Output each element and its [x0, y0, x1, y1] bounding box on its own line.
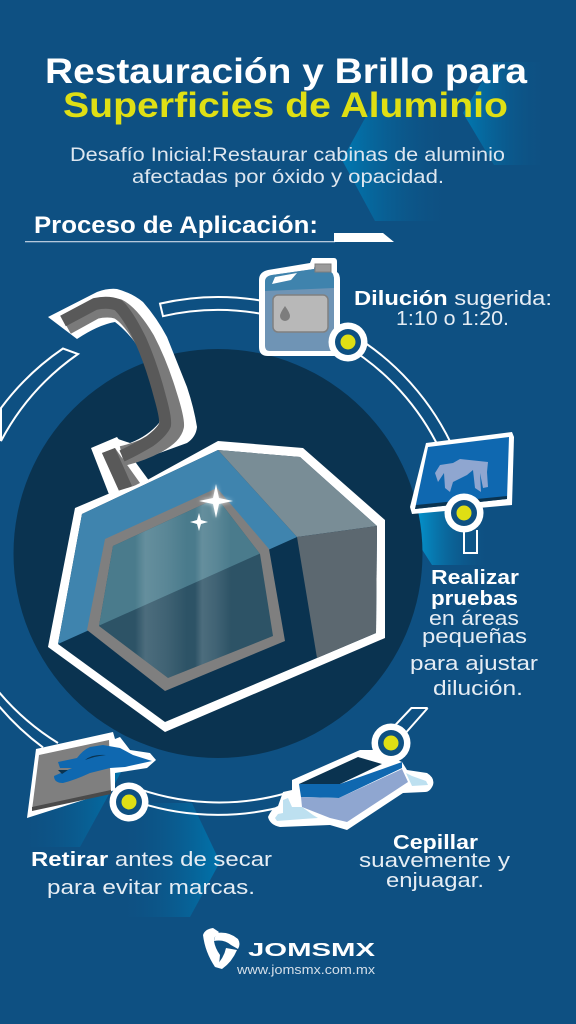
- footer logo: [203, 928, 376, 977]
- section heading: Proceso de Aplicación:: [34, 212, 318, 239]
- step 4: text: [31, 848, 272, 899]
- step 1: text: [354, 287, 552, 330]
- step 3: text: enjuagar.: [386, 869, 484, 892]
- subtitle: initial challenge: [70, 144, 505, 188]
- logo mark: [203, 928, 240, 969]
- step 1: jug icon: [259, 258, 340, 356]
- cabin window: [87, 488, 285, 691]
- process ring segments: [0, 297, 477, 815]
- title: Restauración y Brillo para: [45, 52, 528, 91]
- step 1: text: Dilución sugerida:: [354, 287, 552, 310]
- step 2: text: en áreas: [429, 607, 519, 630]
- step 2: text: dilución.: [433, 677, 523, 700]
- central dark circle: [14, 349, 422, 758]
- step 3: text: suavemente y: [359, 849, 511, 872]
- brand name: JOMSMX: [248, 940, 375, 960]
- step 4: text: para evitar marcas.: [47, 876, 255, 899]
- step 3: text: Cepillar: [393, 831, 478, 854]
- step 3: text: [359, 831, 511, 892]
- step 4: text: Retirar antes de secar: [31, 848, 272, 871]
- title: Superficies de Aluminio: [63, 86, 508, 125]
- step 4: cloth and surface icon: [27, 732, 156, 818]
- hose: [48, 289, 197, 497]
- subtitle: initial challenge: afectadas por óxido y opacidad.: [132, 166, 444, 188]
- step 2: text: Realizar: [431, 566, 519, 589]
- step 2: text: [410, 566, 538, 700]
- step 3: brush icon: [268, 750, 433, 830]
- step 1: node: [328, 322, 368, 362]
- step 1: text: 1:10 o 1:20.: [396, 307, 509, 330]
- aluminium cabin: [48, 441, 385, 732]
- sparkles: [190, 484, 233, 531]
- step 4: node: [110, 782, 148, 822]
- subtitle: initial challenge: Desafío Inicial:Restaurar cabinas de aluminio: [70, 144, 505, 166]
- website: www.jomsmx.com.mx: [236, 962, 376, 977]
- step 2: node: [444, 494, 484, 532]
- step 2: test panel icon: [410, 432, 514, 514]
- section heading: [25, 212, 394, 242]
- step 2: text: pequeñas: [422, 625, 527, 648]
- step 2: text: para ajustar: [410, 652, 538, 675]
- step 2: text: pruebas: [431, 587, 518, 610]
- step 3: node: [372, 724, 410, 762]
- title: [45, 52, 528, 125]
